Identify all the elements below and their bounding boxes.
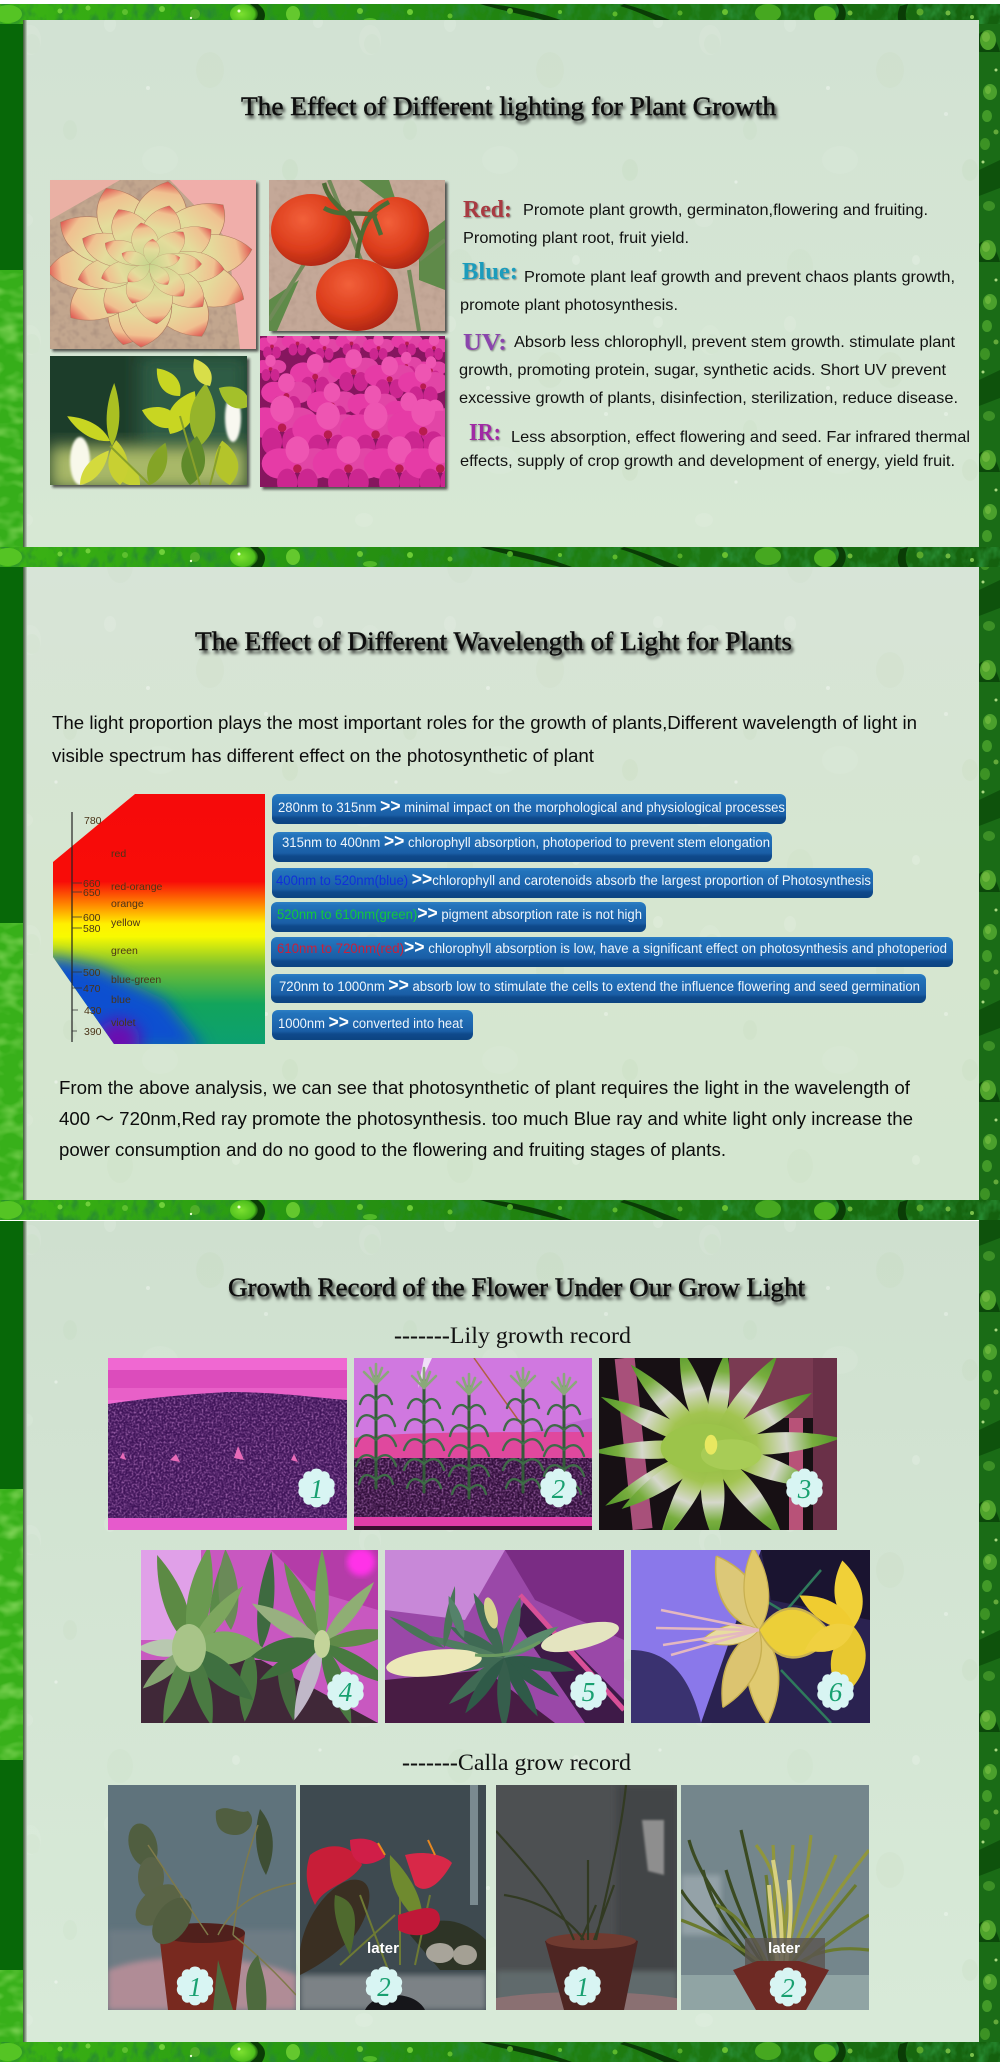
badge 1 [298,1468,335,1507]
photo: orchid 2 after [681,1785,869,2010]
badge 6: 6 [829,1677,843,1707]
photo: lily step 1 [108,1358,347,1530]
text block: Red: Promoting plant root, fruit yield. [463,230,689,247]
chart: visible light spectrum: 780 [84,815,102,827]
badge 1: 1 [576,1972,589,2002]
photo: lily step 5 [385,1550,624,1723]
chart: visible light spectrum: red [111,848,126,860]
intro paragraph: The light proportion plays the most important roles for the growth of plants,Different wavelength of light in [52,713,917,733]
badge 2 [366,1966,402,2005]
badge 6 [817,1672,854,1710]
title: growth record: Growth Record of the Flower Under Our Grow Light [228,1273,806,1302]
bar: 720-1000nm: 720nm to 1000nm >> absorb low to stimulate the cells to extend the influence flowering and seed germination [279,975,920,995]
badge 1 [177,1966,213,2005]
bar: 280-315nm [272,794,786,824]
text block: Blue: promote plant photosynthesis. [460,297,678,314]
chart: visible light spectrum: orange [111,898,144,910]
chart: visible light spectrum: violet [111,1017,136,1029]
bar: 610-720nm red: 610nm to 720nm(red)>> chlorophyll absorption is low, have a significant effect on photosynthesis and photoperiod [277,937,947,957]
bar: 720-1000nm [271,974,926,1003]
bar: 315-400nm: 315nm to 400nm >> chlorophyll absorption, photoperiod to prevent stem elongation [282,831,770,851]
chart: visible light spectrum: green [111,945,138,957]
conclusion paragraph: 400 ～ 720nm,Red ray promote the photosynthesis. too much Blue ray and white light only increase the [59,1109,913,1129]
badge 2: 2 [552,1474,565,1504]
text block: IR [460,420,970,470]
text block: Blue: Promote plant leaf growth and prevent chaos plants growth, [524,269,955,286]
panel: wavelength effect background [23,567,979,1200]
photo: lily step 2 [354,1358,592,1530]
badge 3: 3 [797,1474,811,1504]
text block: Blue: Blue: [462,259,518,285]
conclusion paragraph [59,1078,913,1160]
text block: UV: excessive growth of plants, disinfection, sterilization, reduce disease. [459,390,958,407]
text block: Red: Promote plant growth, germinaton,flowering and fruiting. [523,202,928,219]
text block: UV: UV: [463,330,507,356]
intro paragraph: visible spectrum has different effect on the photosynthetic of plant [52,746,594,766]
photo: orchid 1 before [496,1785,677,2010]
chart: visible light spectrum: blue [111,994,131,1006]
text block: IR: Less absorption, effect flowering and seed. Far infrared thermal [511,429,970,446]
chart: visible light spectrum: 430 [84,1005,102,1017]
text block: UV: Absorb less chlorophyll, prevent stem growth. stimulate plant [514,334,956,351]
badge 2 [540,1468,577,1507]
bar: 280-315nm: 280nm to 315nm >> minimal impact on the morphological and physiological processes [278,796,785,816]
text block: IR: effects, supply of crop growth and development of energy, yield fruit. [460,453,955,470]
text block: UV: growth, promoting protein, sugar, synthetic acids. Short UV prevent [459,362,947,379]
label: later: later [367,1940,399,1957]
chart: visible light spectrum: yellow [111,917,141,929]
chart: visible light spectrum: red-orange [111,881,163,893]
bar: 520-610nm green [271,902,646,932]
badge 5: 5 [582,1677,595,1707]
bar: 315-400nm [273,831,772,862]
photo: lily step 3 [599,1358,837,1530]
badge 4 [327,1672,364,1710]
badge 1: 1 [188,1972,202,2002]
text block: Blue [460,259,955,314]
badge 2: 2 [377,1972,391,2002]
badge 1: 1 [310,1474,323,1504]
photo: lily step 6 [631,1550,870,1723]
title: different wavelength: The Effect of Different Wavelength of Light for Plants [195,627,792,656]
chart: visible light spectrum: 500 [83,967,101,979]
badge 3 [786,1468,823,1507]
bar: 610-720nm red [271,937,953,967]
photo: calla 1 before [108,1785,296,2010]
bar: 1000nm: 1000nm >> converted into heat [278,1012,463,1032]
intro paragraph [52,713,917,766]
badge 2 [770,1968,806,2006]
badge 1 [564,1966,601,2005]
bar: 400-520nm blue [272,868,873,898]
conclusion paragraph: power consumption and do no good to the flowering and fruiting stages of plants. [59,1140,726,1160]
photo: green leaves [50,355,255,492]
bar: 1000nm [272,1010,473,1040]
title: different lighting: The Effect of Different lighting for Plant Growth [241,92,776,121]
chart: visible light spectrum: 470 [83,983,101,995]
badge 5 [570,1672,607,1710]
text block: Red [463,197,928,247]
chart: visible light spectrum: 660 [83,878,101,890]
badge 2: 2 [781,1973,795,2003]
panel: growth record background [23,1221,979,2042]
label: later: later [768,1940,800,1957]
photo: lily step 4 [141,1550,378,1723]
photo: calla 2 after [300,1785,486,2010]
photo: pink orchids [246,329,476,496]
text block: UV [459,330,958,407]
panel: lighting effect background [23,20,979,547]
bar: 400-520nm blue: 400nm to 520nm(blue) >>chlorophyll and carotenoids absorb the largest proportion of Photosynthesis [276,869,871,889]
bar: 520-610nm green: 520nm to 610nm(green)>> pigment absorption rate is not high [277,903,642,923]
subheading: calla: -------Calla grow record [402,1750,632,1775]
chart: visible light spectrum: 650 [83,887,101,899]
chart: visible light spectrum [53,794,265,1044]
text block: IR: IR: [469,420,501,446]
conclusion paragraph: From the above analysis, we can see that photosynthetic of plant requires the light in the wavelength of [59,1078,911,1098]
subheading: lily: -------Lily growth record [394,1323,632,1348]
chart: visible light spectrum: 390 [84,1026,102,1038]
chart: visible light spectrum: 580 [83,923,101,935]
chart: visible light spectrum: blue-green [111,974,161,986]
chart: visible light spectrum: 600 [83,912,101,924]
photo: tomatoes [269,180,445,331]
badge 4: 4 [339,1677,352,1707]
text block: Red: Red: [463,197,512,223]
photo: succulent [45,178,256,350]
